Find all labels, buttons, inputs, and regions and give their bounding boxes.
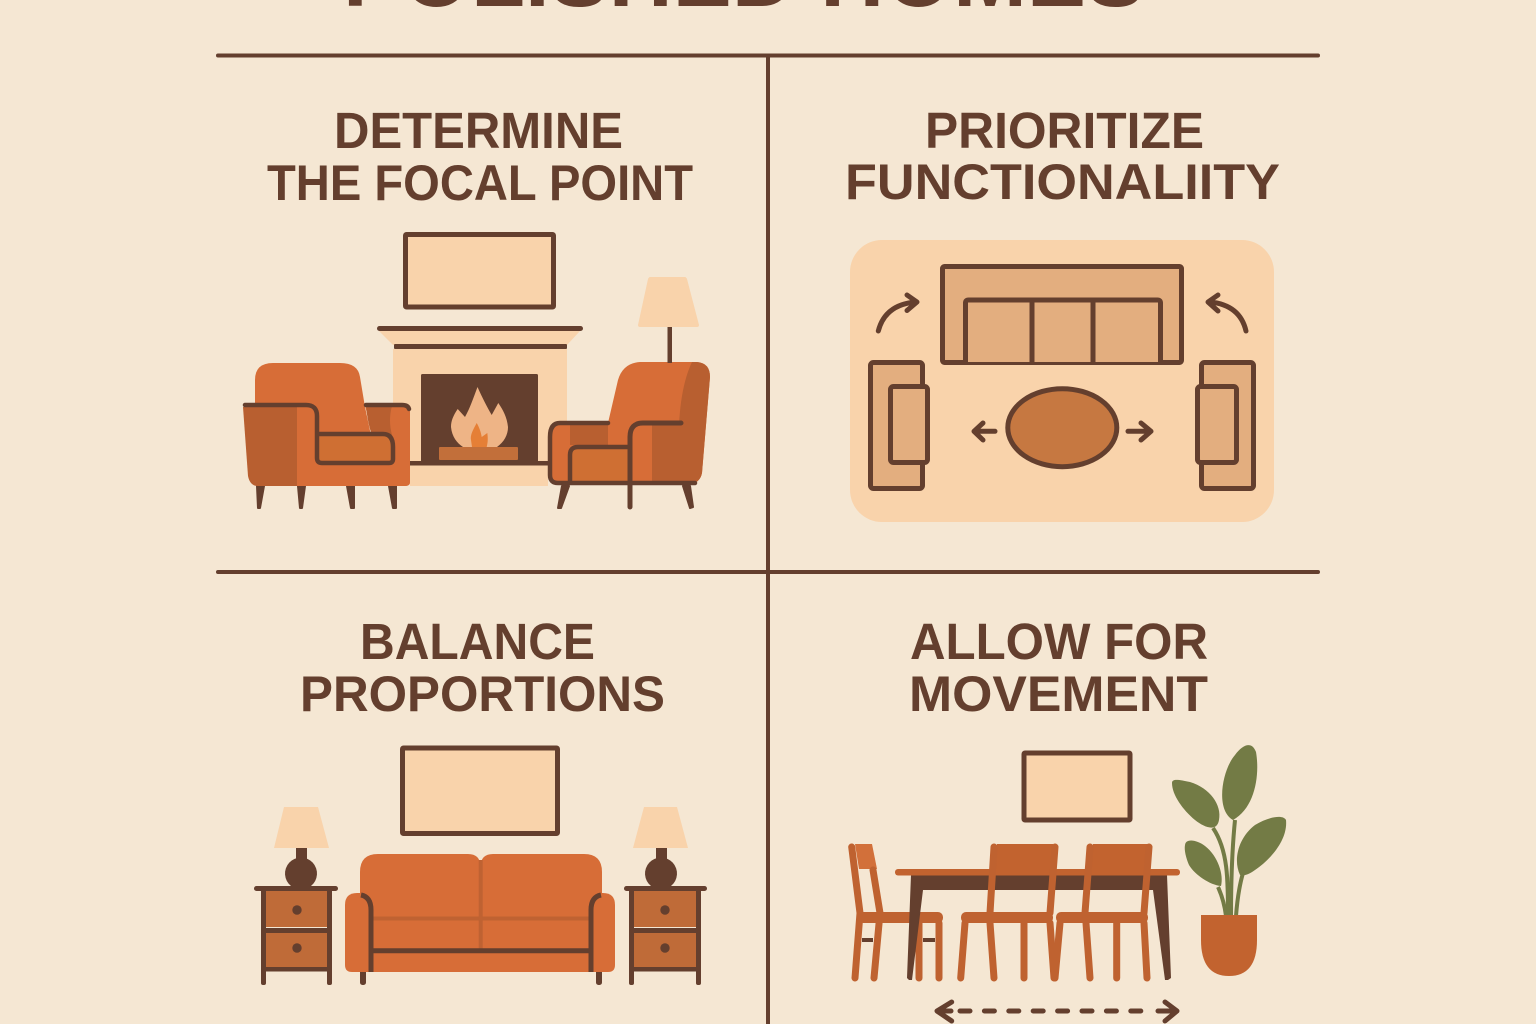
heading: allow for movement: MOVEMENT	[909, 666, 1208, 722]
heading: prioritize functionality	[845, 102, 1280, 210]
icon: floor lamp	[638, 277, 699, 363]
panel: balance proportions	[254, 613, 707, 985]
heading: balance proportions: BALANCE	[360, 613, 595, 670]
icon: right nightstand	[624, 886, 707, 985]
heading: prioritize functionality: FUNCTIONALIITY	[845, 154, 1280, 210]
heading: determine the focal point: THE FOCAL POINT	[267, 155, 693, 211]
heading: allow for movement: ALLOW FOR	[910, 613, 1208, 670]
icon: left table lamp	[274, 807, 329, 886]
floor plan rug	[850, 240, 1274, 522]
panel: prioritize functionality	[845, 102, 1280, 522]
heading: prioritize functionality: PRIORITIZE	[925, 102, 1204, 159]
icon: right table lamp	[633, 807, 688, 886]
panel: determine the focal point	[243, 102, 710, 508]
icon: wall art above sofa	[402, 748, 558, 834]
icon: left nightstand	[254, 886, 338, 985]
icon: wall art above table	[1024, 753, 1130, 820]
heading: determine the focal point: DETERMINE	[334, 102, 623, 159]
arrow: dashed double-headed walkway	[937, 1002, 1177, 1021]
icon: center chair	[961, 844, 1055, 978]
icon: potted plant	[1172, 745, 1286, 976]
arrow: right	[1128, 423, 1151, 440]
icon: dining table	[895, 869, 1180, 980]
heading: determine the focal point	[267, 102, 693, 211]
icon: coffee table	[1008, 389, 1117, 467]
heading: balance proportions: PROPORTIONS	[300, 666, 665, 722]
arrow: curved right	[1208, 295, 1246, 331]
icon: sofa	[345, 854, 615, 985]
arrow: curved left	[878, 295, 917, 331]
icon: side chair	[852, 844, 943, 978]
panel: allow for movement	[852, 613, 1286, 1021]
heading: allow for movement	[909, 613, 1208, 722]
icon: right armchair plan	[1198, 362, 1254, 488]
icon: left armchair plan	[870, 362, 928, 488]
arrow: left	[974, 423, 995, 440]
icon: left armchair	[243, 363, 410, 508]
icon: sofa plan	[942, 266, 1182, 362]
icon: right armchair	[550, 362, 710, 508]
icon: wall art above mantel	[406, 234, 554, 307]
icon: fireplace	[377, 326, 583, 486]
heading: balance proportions	[300, 613, 665, 722]
icon: right chair	[1055, 844, 1149, 978]
